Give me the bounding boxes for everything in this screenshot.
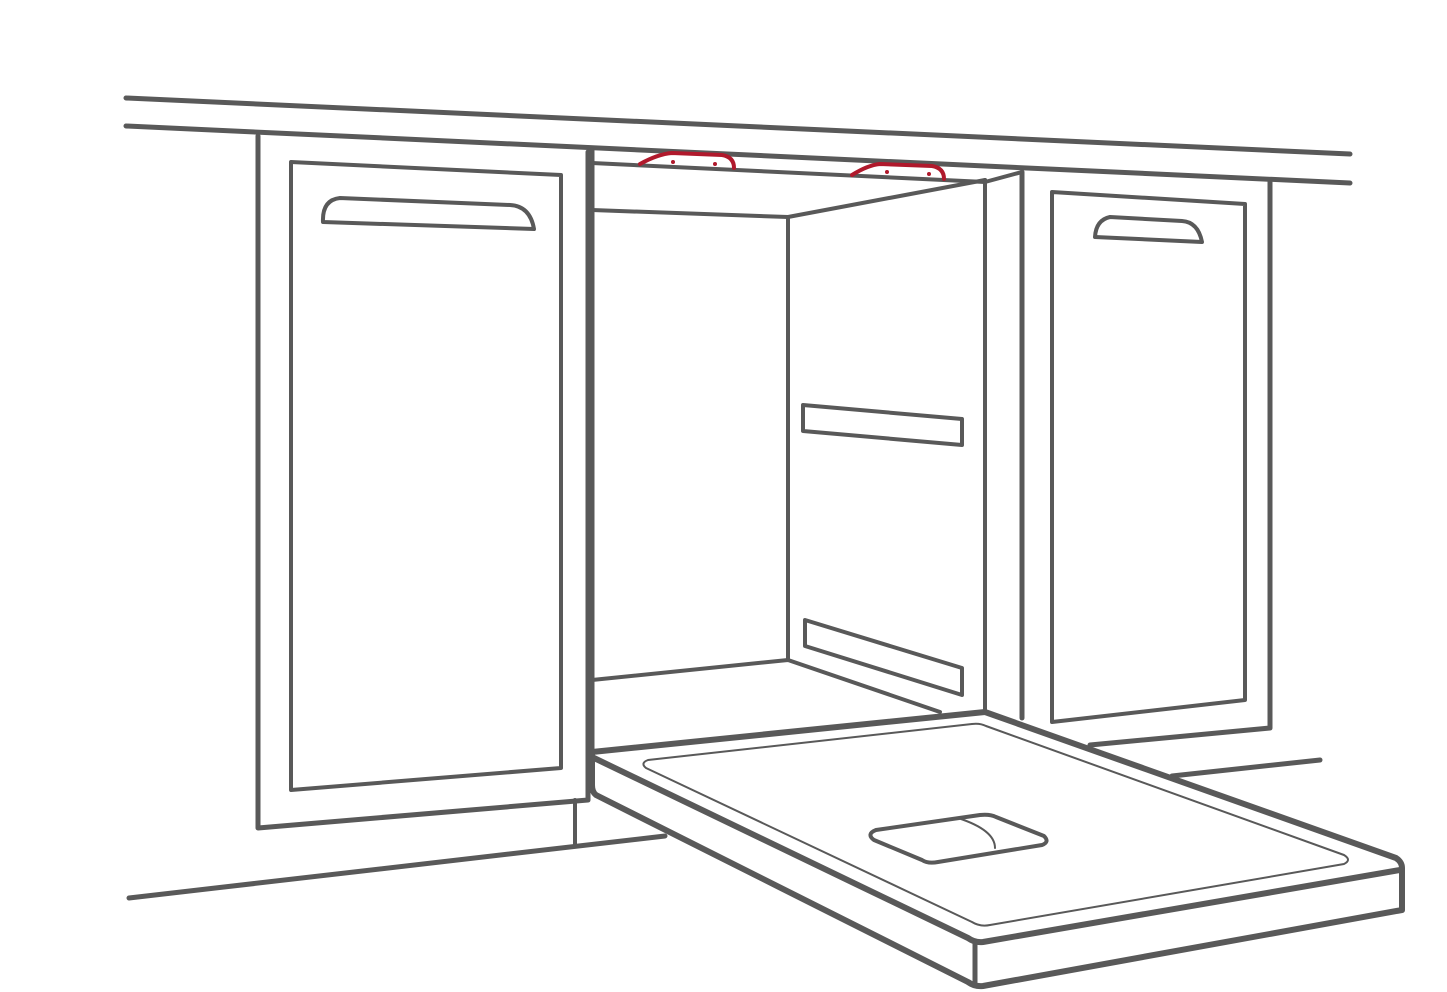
right cabinet <box>1052 182 1270 745</box>
lower rail <box>805 620 962 695</box>
door handle <box>870 815 1047 863</box>
left cabinet <box>258 136 588 845</box>
door inner panel <box>643 724 1348 926</box>
upper rail <box>803 405 962 445</box>
dishwasher door open <box>592 712 1402 986</box>
countertop <box>126 98 1350 183</box>
handle: left cabinet <box>323 198 534 229</box>
red mounting brackets <box>640 153 944 179</box>
floor lines <box>129 760 1320 898</box>
handle: right cabinet <box>1095 217 1202 242</box>
dishwasher cavity <box>592 150 1022 752</box>
